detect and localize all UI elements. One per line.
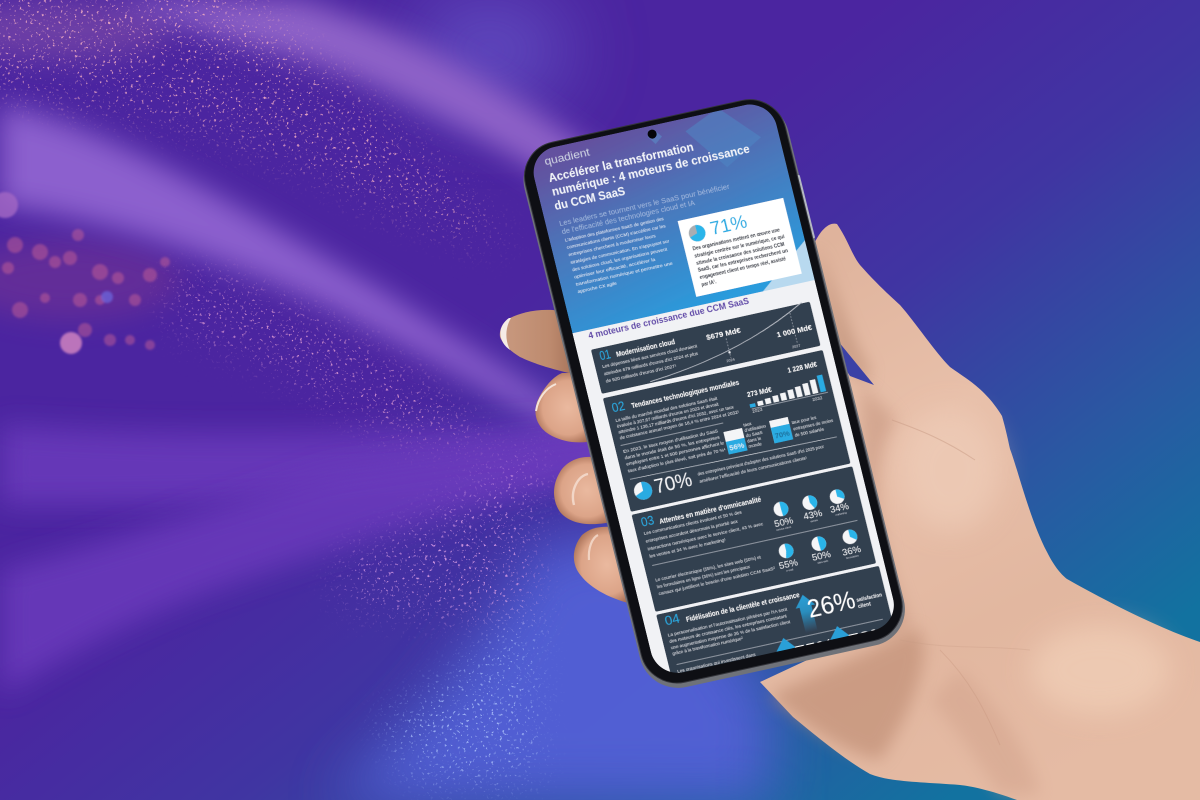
intro paragraph: approche CX agile [577, 281, 618, 294]
growth curve chart: 1 000 Md€ [776, 325, 813, 339]
index finger [500, 310, 600, 380]
jar: 56%: 56% [729, 442, 746, 453]
swirl band bottom [0, 430, 620, 695]
arrow: small up right [830, 626, 849, 640]
intro paragraph: L'adoption des plateformes SaaS de gestion des [564, 216, 665, 243]
panel 02: global tech trends: évaluée à 207,67 milliards d'euros en 2023 et devrait [616, 401, 720, 429]
callout: 71%: Des organisations mettent en œuvre une [692, 227, 781, 252]
intro paragraph [564, 216, 678, 294]
pie stats: 55% [778, 557, 800, 572]
panel 02: global tech trends: En 2023, le taux moyen d'utilisation du SaaS [623, 428, 719, 454]
title: numérique : 4 moteurs de croissance [550, 142, 751, 199]
intro paragraph: stratégies de communication. En s'appuyant sur [570, 238, 670, 265]
panel 02: global tech trends: taux pour les [791, 415, 818, 425]
pie stats: 36% [841, 544, 863, 559]
panel 02: global tech trends: 70% [652, 469, 695, 498]
callout: 71%: 71% [708, 212, 749, 239]
callout: 71%: SaaS, car les entreprises recherchent un [697, 248, 789, 274]
panel 01: cloud modernisation [591, 301, 821, 394]
pie: 70% [634, 481, 652, 500]
jar: 56% [723, 428, 747, 454]
intro paragraph: des solutions cloud, les organisations peuvent [572, 246, 668, 272]
panel 03: omnichannel: les formulaires en ligne (36%) sont les principaux [656, 564, 751, 589]
phone [515, 92, 914, 698]
callout: 71% [678, 198, 802, 297]
panel 04: loyalty and growth: La personnalisation et l'automatisation pilotées par l'IA sont [667, 606, 788, 638]
panel 03: omnichannel: 03 [639, 512, 656, 530]
bar chart: 2023 [752, 407, 763, 414]
ring finger [554, 457, 620, 524]
growth curve chart: 2024 [726, 357, 735, 363]
growth curve chart: $679 Md€ [706, 328, 742, 342]
intro paragraph: communications clients (CCM) s'accélère car les [566, 223, 667, 250]
panel 03: omnichannel: interactions numériques avec le service client, 43 % avec [647, 521, 764, 551]
intro paragraph: optimiser leur efficacité, accélérer la [573, 257, 656, 280]
subtitle: de l'efficacité des technologies cloud et IA [561, 198, 696, 236]
pie stats: formulaires [846, 553, 860, 560]
arrow: large up [796, 594, 817, 632]
panel 02: global tech trends: Tendances technologiques mondiales [631, 380, 740, 410]
bar chart: 273 Md€ [747, 387, 773, 399]
panel 02: global tech trends: La taille du marché mondial des solutions SaaS était [615, 396, 718, 423]
pie stats: marketing [835, 510, 848, 517]
swirl band top [110, 0, 620, 225]
jar: 70% [769, 417, 793, 443]
side button [796, 175, 815, 239]
panel 02: global tech trends: atteindre 1 138,17 milliards d'euros d'ici 2032, avec un taux [618, 404, 735, 435]
panel 04: loyalty and growth: client [857, 601, 872, 610]
section heading: 4 moteurs de croissance due CCM SaaS [587, 296, 750, 341]
pie stats: sites web [817, 559, 829, 565]
panel 02: global tech trends: de croissance annuel moyen de 18,4 % entre 2024 et 2032¹ [619, 409, 740, 440]
pie stats: service client [776, 525, 792, 532]
pie stats: 50% [773, 515, 795, 530]
panel 03: omnichannel [632, 466, 876, 612]
callout: 71%: par IA¹. [701, 279, 718, 288]
title: du CCM SaaS [553, 184, 626, 213]
panel 02: global tech trends: d'utilisation [744, 423, 767, 433]
callout: 71%: stratégie centrée sur le numérique, ce qui [694, 234, 786, 260]
swirl band lower [0, 420, 620, 505]
panel 02: global tech trends: dans le monde était de 56 %, les entreprises [624, 435, 721, 460]
panel 02: global tech trends [603, 350, 851, 512]
panel 02: global tech trends: monde [748, 441, 763, 449]
arrow: small up left [776, 638, 795, 652]
intro paragraph: entreprises cherchent à moderniser leurs [568, 233, 657, 257]
screen contents [527, 96, 904, 695]
jar: 70%: 70% [774, 430, 791, 441]
intro paragraph: transformation numérique et permettre une [575, 261, 674, 287]
growth curve chart [639, 301, 816, 382]
panel 04: loyalty and growth: Les organisations qui investissent dans [677, 652, 757, 674]
pie stats: e-mail [786, 567, 794, 573]
growth curve chart: 2027 [792, 344, 801, 349]
panel 03: omnichannel: entreprises accordent désormais la priorité aux [645, 518, 739, 544]
panel 04: loyalty and growth: satisfaction [856, 592, 883, 604]
panel 01: cloud modernisation: atteindre 679 milliards d'euros d'ici 2024 et plus [603, 351, 699, 376]
panel 04: loyalty and growth: 26% [805, 586, 858, 624]
panel 03: omnichannel: Les communications clients évoluent et 50 % des [643, 509, 743, 536]
callout: 71%: engagement client en temps réel, assisté [699, 256, 787, 281]
panel 04: loyalty and growth: 04 [663, 611, 681, 628]
pie stats [773, 489, 862, 572]
middle finger [535, 373, 600, 442]
hand: fingers behind the phone [500, 310, 640, 603]
pie: 71% [688, 224, 706, 242]
hand: palm, thumb and wrist [760, 224, 1200, 800]
pie stats: 34% [829, 501, 851, 516]
subtitle: Les leaders se tournent vers le SaaS pour bénéficier [558, 182, 731, 228]
phone body [517, 93, 910, 690]
panel 04: loyalty and growth: Fidélisation de la clientèle et croissance [686, 592, 801, 624]
gap between thumb and palm [838, 341, 874, 385]
callout: 71%: stimule la croissance des solutions CCM [696, 242, 785, 267]
panel 01: cloud modernisation: 01 [598, 346, 612, 363]
panel 02: global tech trends: dans le [747, 436, 762, 444]
panel 02: global tech trends: du SaaS [745, 430, 763, 438]
panel 01: cloud modernisation: Les dépenses liées aux services cloud devraient [602, 343, 698, 369]
phone metal frame [516, 94, 913, 695]
panel 03: omnichannel: les ventes et 34 % avec le marketing¹ [649, 537, 727, 559]
panel 02: global tech trends: de 500 salariés [794, 426, 825, 438]
bar chart: 1 228 Md€ [787, 362, 818, 375]
panel 04: loyalty and growth: 78% [847, 624, 891, 654]
bar chart: 2032 [812, 395, 823, 402]
panel 04: loyalty and growth: grâce à la transformation numérique² [672, 636, 744, 656]
swirl band middle [0, 105, 620, 470]
panel 02: global tech trends: entreprises de moins [793, 418, 834, 431]
logo: quadient: quadient [543, 147, 591, 168]
panel 04: loyalty and growth: des moteurs de croissance clés, les entreprises constatant [669, 613, 788, 644]
panel 01: cloud modernisation: de 920 milliards d'euros d'ici 2027¹ [605, 363, 677, 384]
title: Accélérer la transformation [547, 140, 695, 185]
particle dust and bokeh [0, 0, 535, 780]
camera punch-hole [647, 129, 658, 139]
panel 02: global tech trends: taux [743, 421, 753, 428]
bar chart [746, 362, 826, 413]
panel 02: global tech trends: des entreprises prévoient d'adopter des solutions SaaS d'ici 2025 pour [697, 444, 825, 477]
panel 02: global tech trends: 02 [610, 398, 626, 415]
panel 04: loyalty and growth: 75% [793, 635, 838, 665]
pie stats: ventes [810, 518, 819, 523]
panel 02: global tech trends: taux d'adoption le plus élevé, soit près de 70 %⁴ [627, 447, 726, 473]
panel 03: omnichannel: canaux qui justifient le besoin d'une solution CCM SaaS² [658, 565, 776, 596]
little finger [574, 527, 640, 603]
panel 02: global tech trends: employant entre 1 et 500 personnes affichant le [626, 440, 725, 467]
panel 01: cloud modernisation: Modernisation cloud [616, 339, 676, 359]
panel 04: loyalty and growth: une augmentation moyenne de 26 % de la satisfaction client [670, 619, 791, 650]
panel 04: loyalty and growth [656, 566, 892, 673]
panel 03: omnichannel: Attentes en matière d'omnicanalité [659, 497, 762, 526]
panel 03: omnichannel: Le courrier électronique (55%), les sites web (50%) et [655, 554, 762, 583]
pie stats: 50% [811, 549, 833, 564]
pie stats: 43% [802, 508, 824, 523]
panel 02: global tech trends: améliorer l'efficacité de leurs communications clients¹ [699, 455, 808, 484]
hero panel [527, 96, 815, 333]
